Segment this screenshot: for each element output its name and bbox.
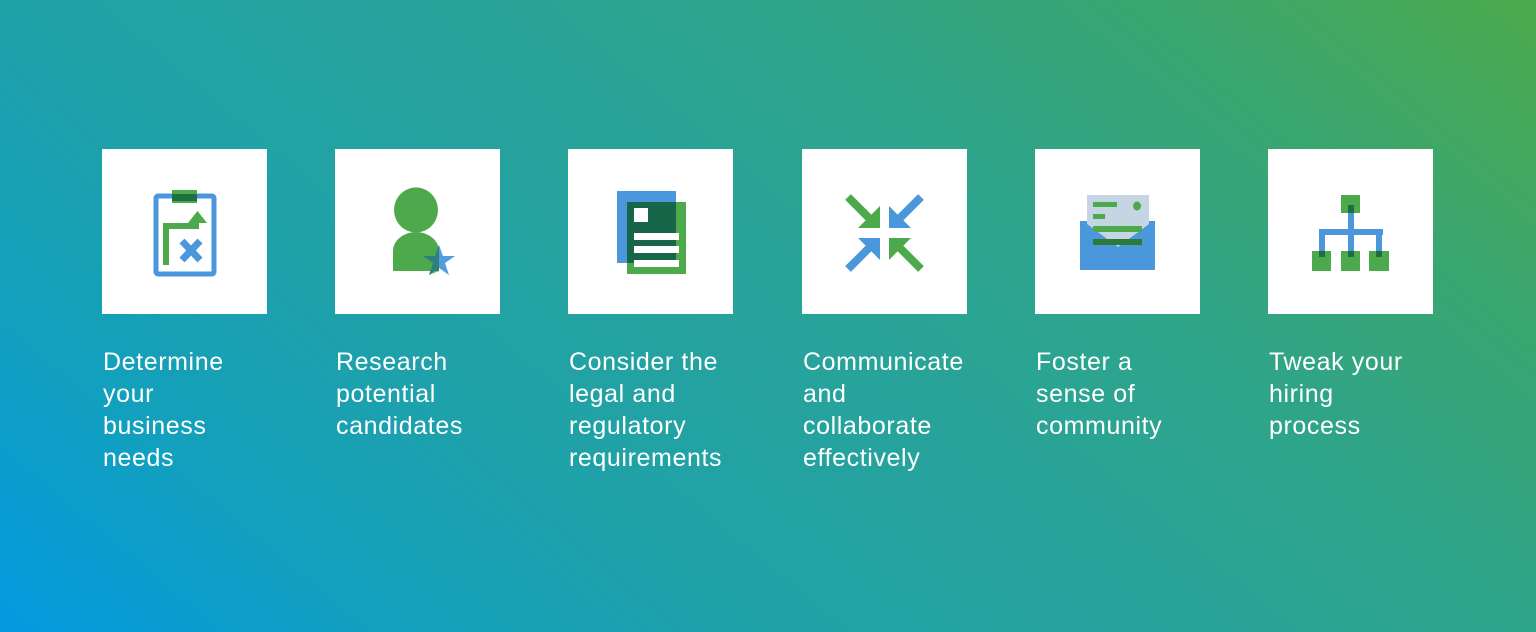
label 2: potential: [336, 380, 436, 408]
label 4: effectively: [803, 444, 920, 472]
label 5: sense of: [1036, 380, 1135, 408]
label 2: [336, 348, 463, 440]
card 2: person with star icon: [335, 149, 500, 314]
label 1: needs: [103, 444, 174, 472]
label 3: [569, 348, 722, 472]
label 2: Research: [336, 348, 448, 376]
card 3: documents icon: [568, 149, 733, 314]
label 4: Communicate: [803, 348, 964, 376]
label 2: candidates: [336, 412, 463, 440]
label 6: process: [1269, 412, 1361, 440]
card 4: arrows converging icon: [802, 149, 967, 314]
label 3: requirements: [569, 444, 722, 472]
label 1: Determine: [103, 348, 224, 376]
label 4: and: [803, 380, 847, 408]
card 5: envelope icon: [1035, 149, 1200, 314]
label 3: Consider the: [569, 348, 718, 376]
label 3: legal and: [569, 380, 676, 408]
card 6: hierarchy icon: [1268, 149, 1433, 314]
label 6: Tweak your: [1269, 348, 1403, 376]
card 1: clipboard icon: [102, 149, 267, 314]
label 6: [1269, 348, 1403, 440]
label 5: Foster a: [1036, 348, 1132, 376]
label 1: your: [103, 380, 154, 408]
label 5: [1036, 348, 1162, 440]
label 1: business: [103, 412, 206, 440]
label 5: community: [1036, 412, 1162, 440]
label 3: regulatory: [569, 412, 686, 440]
label 1: [103, 348, 224, 472]
label 4: collaborate: [803, 412, 932, 440]
label 4: [803, 348, 964, 472]
label 6: hiring: [1269, 380, 1334, 408]
